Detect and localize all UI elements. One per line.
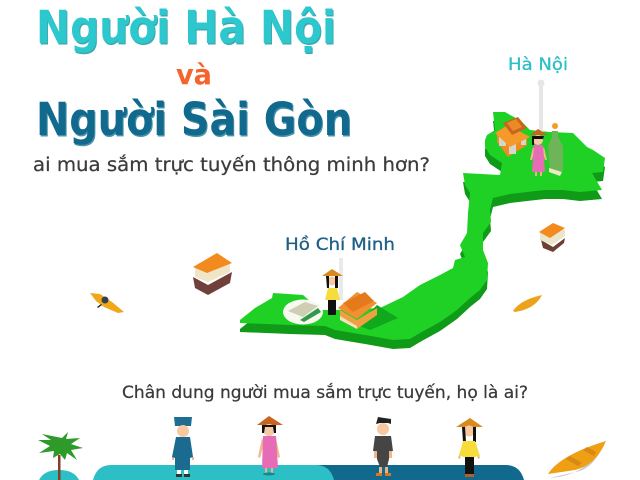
label: Hà Nội: Hà Nội [508,55,568,74]
figure: woman in yellow [322,269,343,315]
icon: temple [495,117,530,157]
icon: palm island [38,432,83,480]
title: và: và [176,58,212,91]
icon: bottle [548,123,563,176]
bar: Sài Gòn [310,465,524,480]
bar: Hà Nội [93,465,334,480]
pin: Hồ Chí Minh [339,258,343,300]
figure: woman in pink, bottom [257,416,283,476]
icon: stilt house, west [193,253,232,295]
figure: woman in pink [530,129,548,176]
title: Người Hà Nội: Người Hà Nội [36,1,336,54]
figure: man in dark jacket [373,417,393,476]
figure: woman in yellow, bottom [456,418,483,477]
icon: kayak [90,293,124,313]
title: Người Sài Gòn: Người Sài Gòn [36,93,352,146]
icon: orange house, south [338,292,377,329]
icon: stilt house, north-east [539,223,565,252]
label: Hồ Chí Minh: Hồ Chí Minh [285,234,395,255]
pin: Hà Nội [538,80,544,132]
subtitle: ai mua sắm trực tuyến thông minh hơn? [33,155,430,176]
figure: man in blue [172,417,194,477]
icon: plate of spring rolls [283,300,323,324]
icon: small boat [513,295,542,312]
icon: large boat [548,441,606,478]
title: Người Sài Gòn: Người Sài Gòn [37,94,353,148]
title: Người Hà Nội: Người Hà Nội [37,2,337,56]
heading: buyer portraits: Chân dung người mua sắm trực tuyến, họ là ai? [122,383,528,402]
map of Vietnam [240,112,605,349]
